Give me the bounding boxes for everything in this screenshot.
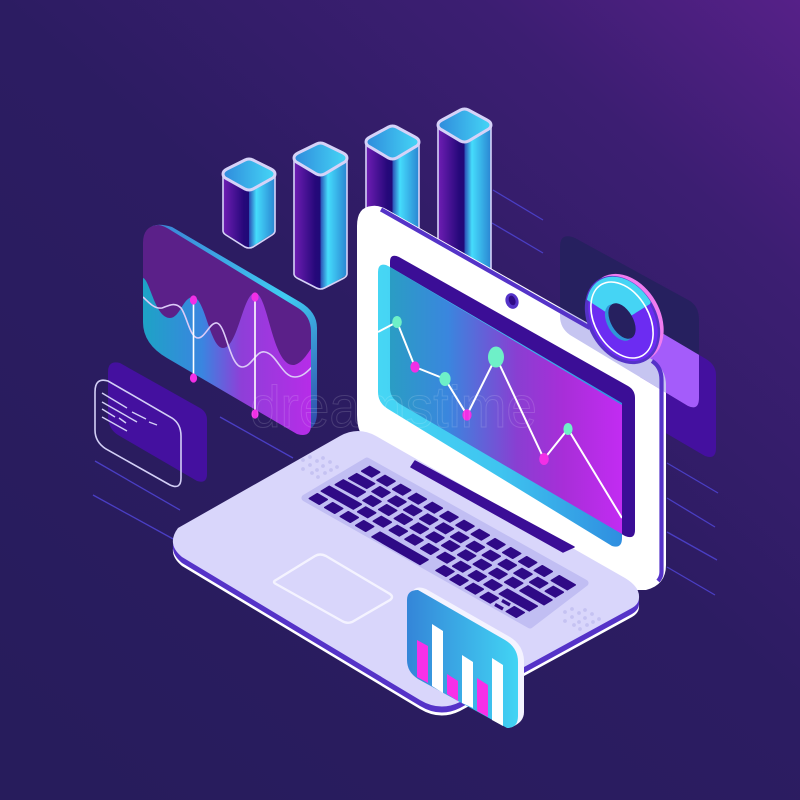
watermark: dreamstime <box>250 375 537 440</box>
marker lines <box>190 292 259 419</box>
lid body <box>357 206 666 590</box>
column 4 <box>438 109 491 270</box>
card: code snippet <box>95 362 207 486</box>
base rim <box>173 440 639 716</box>
card: bar chart <box>407 588 524 728</box>
laptop lid <box>357 206 716 590</box>
column 2 <box>294 143 347 290</box>
webcam <box>503 291 521 311</box>
panel edge <box>150 225 317 428</box>
card: violet behind lid <box>640 320 716 457</box>
violet card <box>108 362 207 482</box>
laptop base <box>173 431 639 716</box>
column 1 <box>223 159 275 248</box>
outlined card <box>95 380 181 486</box>
keyboard keys <box>309 466 575 617</box>
translucent overlap <box>560 307 699 408</box>
screen <box>378 265 622 547</box>
cyan segment <box>586 276 651 316</box>
card face <box>407 590 518 728</box>
donut chart <box>584 274 664 364</box>
bar chart: isometric columns <box>223 109 491 290</box>
panel face <box>143 225 311 435</box>
donut hole <box>599 299 639 346</box>
card: dark behind donut <box>560 236 699 407</box>
speaker dots left <box>301 455 339 479</box>
trackpad <box>274 554 392 623</box>
bars <box>417 624 503 726</box>
column 3 <box>366 126 419 260</box>
white ring <box>578 271 666 369</box>
speaker dots right <box>563 607 601 631</box>
code lines <box>102 393 157 431</box>
hinge slot <box>411 461 574 552</box>
area wave <box>143 278 312 450</box>
keyboard tray <box>305 461 585 625</box>
base surface <box>173 431 639 707</box>
screen bezel <box>390 256 635 537</box>
lid edge strip <box>381 210 662 581</box>
card white back <box>412 588 524 728</box>
panel: area chart <box>143 225 317 450</box>
screen line chart <box>378 316 622 518</box>
